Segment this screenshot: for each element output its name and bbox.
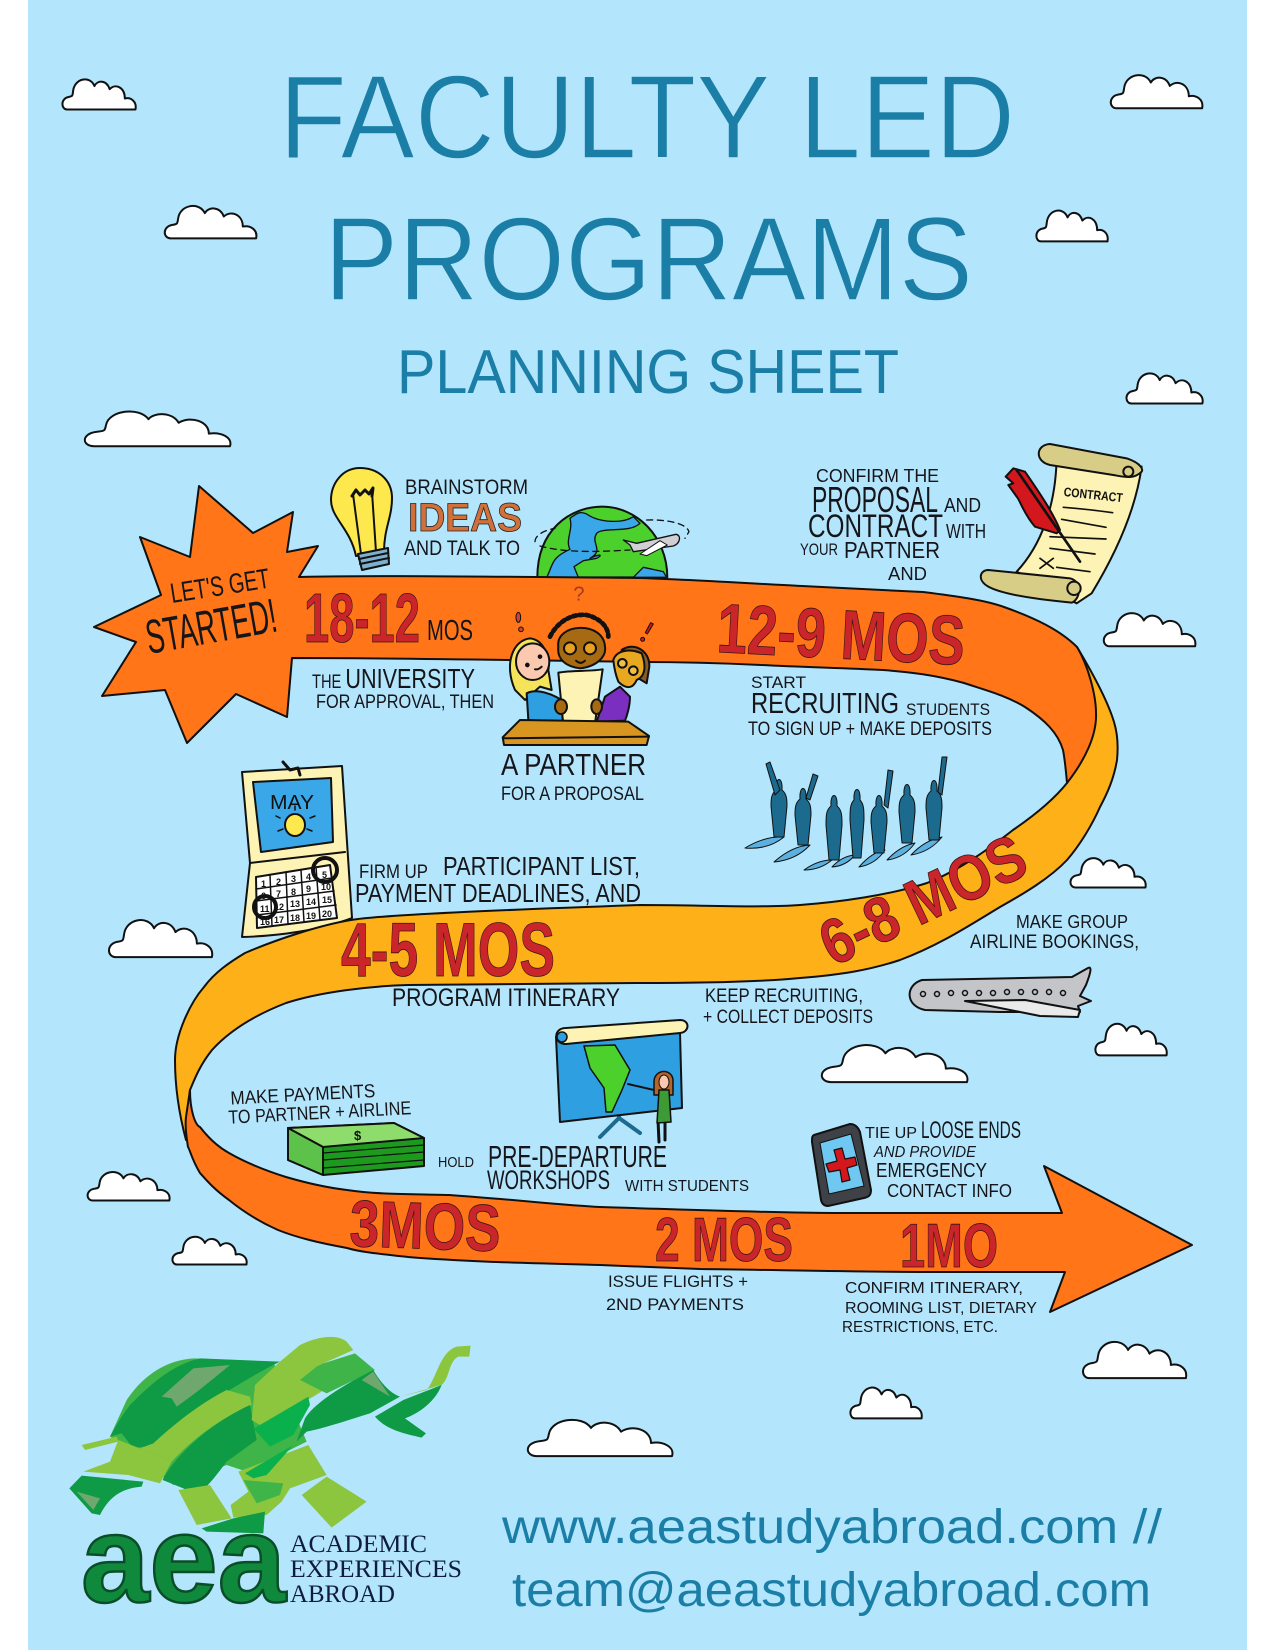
icon: group of students with raised arms [745,757,947,870]
text: tie up loose ends: AND PROVIDE [873,1144,976,1161]
icon: globe with airplane [535,507,689,577]
text: make group airline bookings: MAKE GROUP [1016,912,1128,932]
icon: calendar: 7 [276,889,281,899]
text: confirm itinerary: RESTRICTIONS, ETC. [842,1319,998,1336]
text: hold pre-departure workshops: WITH STUDENTS [625,1178,749,1195]
text: confirm the proposal and contract: AND [888,564,927,584]
text: brainstorm ideas: IDEAS [408,496,522,540]
text: hold pre-departure workshops: HOLD [438,1154,474,1171]
text: confirm the proposal and contract: WITH [946,521,986,543]
logo: academic experiences abroad: ABROAD [290,1581,395,1608]
text: tie up loose ends: CONTACT INFO [887,1181,1012,1201]
icon: calendar: 1 [261,879,266,889]
ribbon label: let's get started: LET'S GET [168,563,272,609]
logo: academic experiences abroad: ACADEMIC [290,1531,427,1558]
icon: three people reading a paper: ? [573,584,584,606]
icon: calendar: 15 [322,895,332,905]
title: FACULTY LED [279,51,1015,184]
icon: calendar: 13 [290,899,300,909]
text: confirm the proposal and contract: YOUR [800,540,838,559]
ribbon label: 2 mos: 2 MOS [655,1206,793,1275]
clouds [62,75,1203,1456]
text: tie up loose ends: LOOSE ENDS [921,1117,1021,1144]
icon: calendar [242,762,352,937]
text: keep recruiting: + COLLECT DEPOSITS [703,1007,873,1028]
footer: website and email [501,1501,1163,1617]
text: keep recruiting [703,986,873,1028]
text: issue flights: ISSUE FLIGHTS + [608,1272,748,1291]
ribbon: starburst and top orange band [94,486,1096,783]
ribbon label: 12-9 mos: 12-9 MOS [715,589,967,680]
text: make payments: MAKE PAYMENTS [230,1081,376,1110]
text: make payments [227,1079,412,1129]
icon: phone with medical cross [812,1124,871,1206]
logo: academic experiences abroad: EXPERIENCES [290,1556,462,1583]
subtitle: PLANNING SHEET [397,338,899,407]
text: firm up participant list: PAYMENT DEADLINES, AND [355,878,641,908]
text: confirm the proposal and contract [800,466,986,584]
logo: academic experiences abroad [290,1531,462,1608]
text: tie up loose ends: EMERGENCY [876,1160,987,1182]
text: confirm the proposal and contract: CONTRACT [808,508,943,544]
icon: calendar: 6 [261,891,266,901]
text: confirm the proposal and contract: PARTNER [844,537,940,563]
icon: calendar: 12 [274,902,284,912]
text: firm up participant list [355,851,641,908]
text: make group airline bookings [970,912,1139,953]
text: program itinerary: PROGRAM ITINERARY [392,984,620,1012]
icon: contract scroll with quill [981,444,1142,603]
icon: calendar: 17 [274,915,284,925]
footer: website and email: www.aeastudyabroad.com // [501,1501,1163,1554]
icon: calendar: 14 [306,897,316,907]
ribbon label: let's get started: STARTED! [142,590,281,665]
text: confirm the proposal and contract: AND [944,495,981,517]
icon: three people reading a paper [503,584,653,745]
icon: contract scroll with quill: CONTRACT [1063,485,1124,505]
text: firm up participant list: FIRM UP [359,862,428,883]
text: the university for approval: THE UNIVERSITY [312,663,475,694]
icon: calendar: 11 [260,904,270,914]
text: a partner for a proposal: A PARTNER [501,747,646,782]
title: PROGRAMS [324,193,973,326]
icon: calendar: 10 [321,882,331,892]
text: start recruiting students: RECRUITING [751,688,899,720]
icon: calendar: MAY [270,792,314,814]
icon: map on stand with teacher [556,1020,688,1142]
text: start recruiting students: START [751,673,806,692]
icon: calendar: 5 [322,870,327,880]
icon: calendar: 19 [306,911,316,921]
icon: calendar: 9 [306,884,311,894]
ribbon label: 3 mos: 3MOS [349,1186,502,1265]
ribbon label: 18-12 mos: MOS [427,615,473,647]
icon: calendar: 4 [306,872,311,882]
text: tie up loose ends [865,1117,1021,1201]
text: the university for approval [312,663,494,713]
text: firm up participant list: PARTICIPANT LIST, [443,851,640,881]
icon: calendar: 2 [276,877,281,887]
ribbon label: 4-5 mos: 4-5 MOS [341,908,555,993]
footer: website and email: team@aeastudyabroad.com [512,1564,1151,1617]
text: start recruiting students [748,673,992,740]
icon: airplane [910,968,1091,1017]
logo: aea wordmark: aea [81,1491,287,1629]
text: a partner for a proposal: FOR A PROPOSAL [501,784,644,805]
icon: calendar: 8 [291,887,296,897]
text: hold pre-departure workshops: WORKSHOPS [487,1165,610,1195]
text: a partner for a proposal [501,747,646,805]
text: brainstorm ideas: AND TALK TO [404,537,520,560]
text: keep recruiting: KEEP RECRUITING, [705,986,863,1007]
text: start recruiting students: STUDENTS [906,700,990,719]
icon: calendar: 20 [322,909,332,919]
text: brainstorm ideas [404,476,528,560]
logo: green elephant [69,1337,471,1533]
icon: calendar: 3 [291,874,296,884]
text: start recruiting students: TO SIGN UP + MAKE DEPOSITS [748,719,992,740]
text: make group airline bookings: AIRLINE BOOKINGS, [970,932,1139,953]
ribbon label: let's get started [142,563,281,665]
text: hold pre-departure workshops: PRE-DEPARTURE [488,1139,667,1174]
text: issue flights: 2ND PAYMENTS [606,1295,744,1314]
icon: light bulb [331,468,392,570]
icon: calendar: 16 [260,917,270,927]
text: make payments: TO PARTNER + AIRLINE [228,1098,412,1129]
text: confirm itinerary: CONFIRM ITINERARY, [845,1280,1023,1297]
ribbon: lower orange band and arrow [186,1090,1192,1312]
text: confirm the proposal and contract: CONFIRM THE [816,466,939,486]
text: confirm itinerary [842,1280,1037,1336]
ribbon: gold middle band [175,647,1118,1140]
icon: stack of money [288,1123,424,1175]
text: hold pre-departure workshops [438,1139,749,1195]
ribbon label: 6-8 mos: 6-8 MOS [808,820,1038,980]
icon: stack of money: $ [354,1128,362,1143]
text: the university for approval: FOR APPROVAL, THEN [316,692,494,713]
text: confirm the proposal and contract: PROPOSAL [812,479,938,520]
text: confirm itinerary: ROOMING LIST, DIETARY [845,1300,1037,1317]
text: issue flights [606,1272,748,1314]
text: tie up loose ends: TIE UP [865,1125,917,1142]
ribbon label: 1 mo: 1MO [900,1212,998,1281]
text: brainstorm ideas: BRAINSTORM [405,476,528,499]
title [279,51,1015,326]
icon: calendar: 18 [290,913,300,923]
ribbon label: 18-12 mos: 18-12 [304,579,420,657]
